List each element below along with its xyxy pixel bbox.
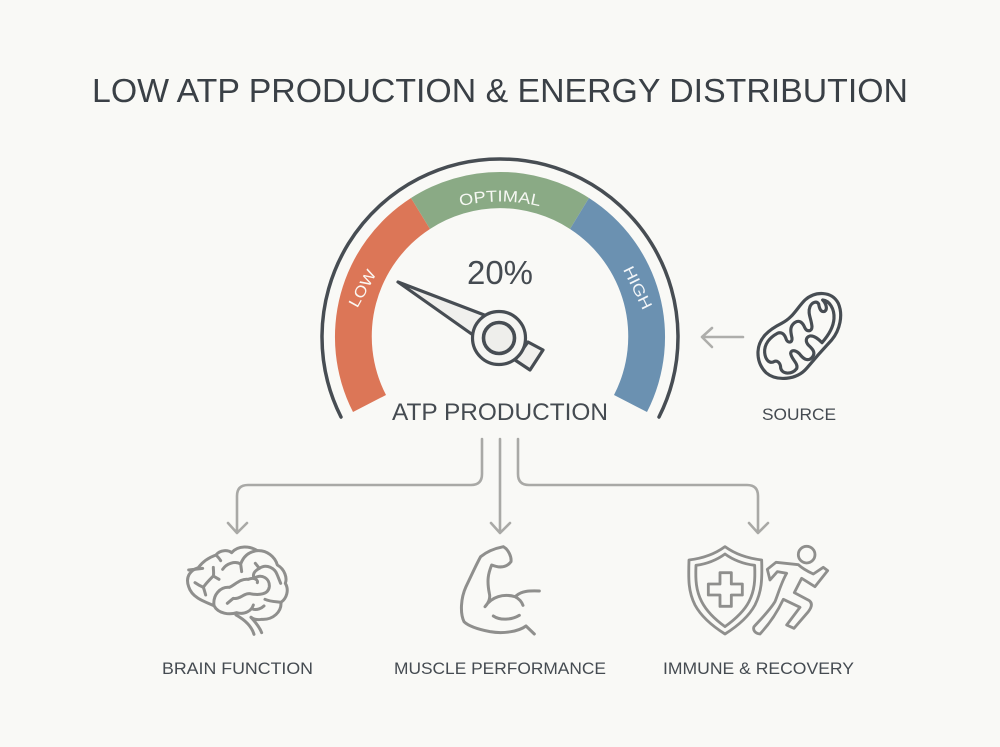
shield — [689, 547, 762, 634]
label: HIGH: HIGH — [619, 264, 655, 312]
arrow: to muscle — [491, 439, 510, 533]
icon: muscle arm — [461, 547, 539, 634]
value: 20%: 20% — [467, 254, 533, 291]
icon: mitochondrion — [758, 294, 841, 378]
arrow: source to gauge — [702, 328, 743, 347]
runner — [754, 546, 828, 634]
arrow: to immune — [518, 439, 768, 533]
arrow: to brain — [228, 439, 482, 533]
icon: brain — [188, 547, 287, 634]
label: source: SOURCE — [762, 405, 836, 424]
label: immune and recovery: IMMUNE & RECOVERY — [663, 659, 854, 678]
arrows: distribution — [228, 439, 768, 533]
label: OPTIMAL: OPTIMAL — [460, 190, 540, 206]
icon: shield and runner — [689, 546, 828, 634]
gauge — [320, 157, 680, 426]
label: muscle performance: MUSCLE PERFORMANCE — [394, 659, 606, 678]
gauge caption: ATP PRODUCTION — [392, 399, 608, 426]
label: brain function: BRAIN FUNCTION — [162, 659, 313, 678]
gauge outer arc — [322, 159, 678, 417]
title: LOW ATP PRODUCTION & ENERGY DISTRIBUTION — [92, 72, 908, 109]
gauge segment: high — [570, 198, 665, 412]
gauge segment: optimal — [411, 172, 589, 229]
gauge segment: low — [335, 198, 430, 412]
needle — [398, 282, 543, 370]
label: LOW: LOW — [346, 267, 380, 310]
